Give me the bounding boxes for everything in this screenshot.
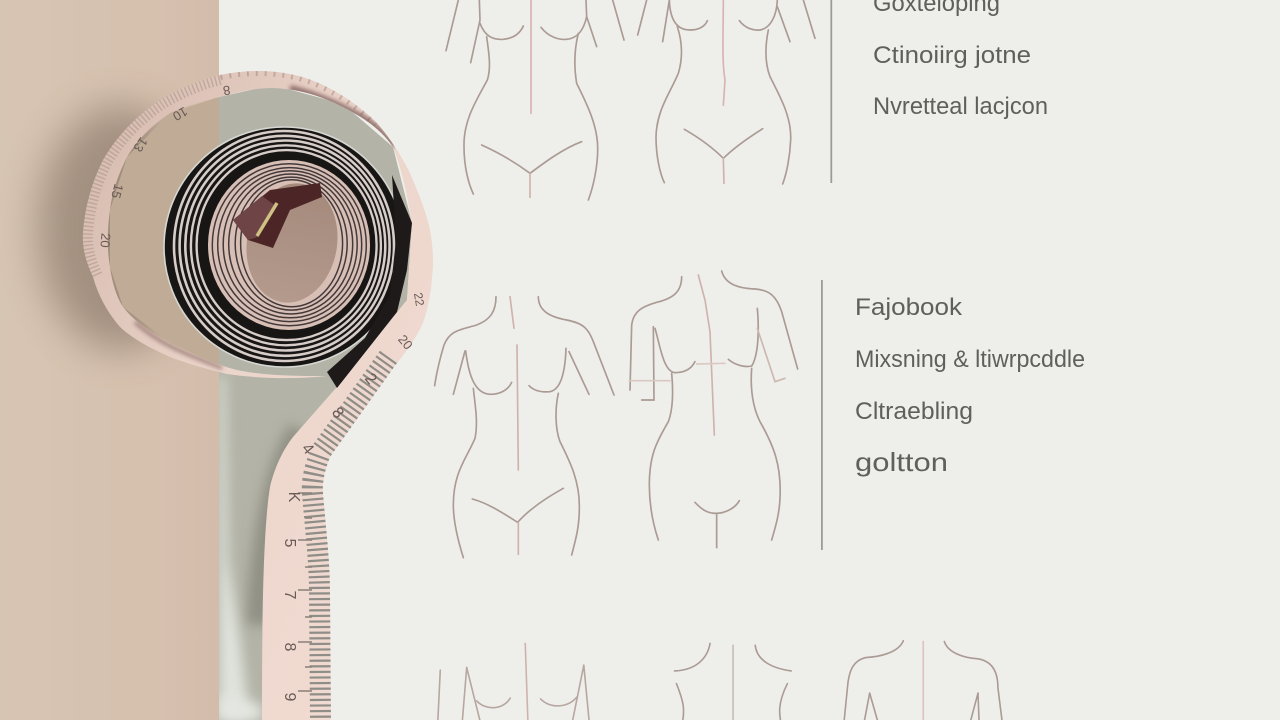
tape numerals: 10 — [170, 104, 190, 124]
tape numerals: 2 — [361, 370, 380, 388]
list: middle labels — [855, 294, 1085, 477]
buckle — [233, 183, 322, 248]
body outline group 1 — [446, 0, 598, 200]
tape numerals — [97, 82, 427, 702]
tape numerals: 22 — [411, 292, 427, 307]
list: middle labels: Cltrаebling — [855, 398, 973, 425]
tape numerals: 5 — [281, 539, 298, 548]
buckle metal tip — [257, 203, 277, 236]
tape numerals: 20 — [395, 332, 416, 352]
tape shadow on beige panel — [38, 97, 219, 366]
list: middle labels: goltton — [855, 447, 948, 477]
divider middle — [821, 280, 823, 550]
tape numerals: K — [285, 492, 302, 503]
body outline group 2 — [613, 0, 815, 184]
tape shadow on chart panel — [219, 85, 412, 720]
coil centre hole — [237, 176, 347, 310]
tape tick marks — [83, 71, 397, 720]
list: top labels: Nvretteal lacjcon — [873, 93, 1048, 120]
list: top labels — [873, 0, 1048, 120]
divider top — [830, 0, 832, 183]
list: middle labels: Fajobook — [855, 294, 963, 321]
body outline group 4 — [629, 271, 798, 548]
body outline group 5 (cropped) — [437, 643, 590, 720]
list: top labels: Ctinoiirg jotne — [873, 42, 1031, 69]
tape numerals: 8 — [281, 643, 298, 652]
tape numerals: 9 — [281, 693, 298, 702]
tape numerals: 8 — [328, 404, 347, 422]
buckle light face — [233, 196, 276, 240]
body outline group 3 — [435, 297, 614, 558]
panel: beige left background — [0, 0, 219, 720]
tape numerals: 7 — [281, 591, 298, 600]
list: middle labels: Mixsning & ltiwrpcddle — [855, 346, 1085, 373]
tape numerals: 20 — [97, 233, 114, 248]
tape dark underside — [327, 175, 412, 388]
tape numerals: 8 — [222, 82, 232, 98]
tape numerals: 13 — [130, 134, 151, 155]
icon: measuring tape — [83, 71, 433, 720]
tape ribbon — [83, 71, 433, 720]
body outline group 7 (cropped) — [843, 641, 1004, 720]
tape numerals: 4 — [298, 440, 317, 458]
tape numerals: 15 — [108, 182, 126, 200]
tape coil — [164, 127, 404, 367]
body outline group 6 (cropped) — [674, 643, 791, 720]
